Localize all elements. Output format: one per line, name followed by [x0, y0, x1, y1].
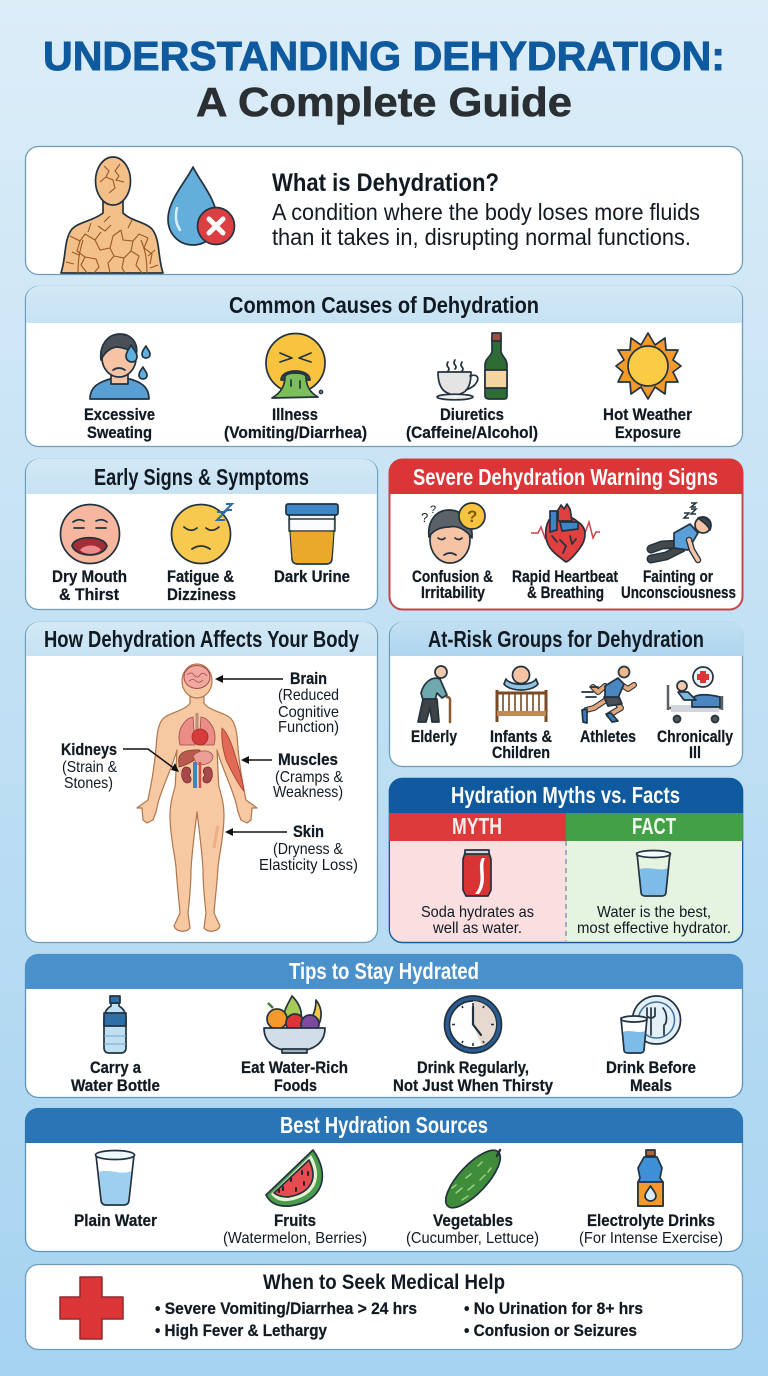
- label: muscles: (Cramps &: [275, 769, 343, 786]
- list: warning criteria: • Confusion or Seizures: [464, 1321, 637, 1340]
- label: muscles: Muscles: [278, 750, 338, 769]
- item: confusion: ?: [421, 510, 428, 525]
- item: electrolyte drinks: Electrolyte Drinks: [587, 1211, 715, 1230]
- heading: When to Seek Medical Help: [263, 1271, 505, 1294]
- label: brain: Cognitive: [278, 704, 339, 721]
- item: clock: Drink Regularly,: [417, 1058, 529, 1077]
- title: UNDERSTANDING DEHYDRATION:: [43, 33, 725, 79]
- icon: cracked dry body: [61, 157, 163, 273]
- panel: common causes: [26, 286, 742, 446]
- item: vegetables: (Cucumber, Lettuce): [406, 1230, 539, 1247]
- item: water bottle: Water Bottle: [71, 1076, 160, 1095]
- item: diuretics: [406, 333, 538, 442]
- text: definition: A condition where the body loses more fluids: [272, 199, 700, 225]
- label: skin: Skin: [293, 822, 324, 841]
- panel: myths vs facts: [389, 778, 743, 942]
- arrow: kidneys: [123, 749, 179, 772]
- item: clock: Not Just When Thirsty: [393, 1076, 553, 1095]
- panel: what is dehydration: [26, 146, 742, 274]
- item: fatigue: Dizziness: [167, 585, 236, 604]
- column: fact: [566, 813, 743, 942]
- item: fatigue: [167, 504, 236, 604]
- item: plain water: [74, 1150, 157, 1230]
- item: athletes: Athletes: [580, 727, 636, 746]
- text: definition: What is Dehydration?: [272, 169, 499, 197]
- column: fact: most effective hydrator.: [577, 920, 731, 937]
- item: vegetables: [406, 1142, 539, 1247]
- item: elderly: Elderly: [411, 727, 457, 746]
- item: infants: [490, 666, 552, 762]
- item: dark urine: Dark Urine: [274, 567, 350, 586]
- item: water bottle: [71, 996, 160, 1095]
- column: fact: FACT: [632, 813, 676, 839]
- label: muscles: [273, 750, 343, 801]
- item: confusion: ?: [467, 507, 477, 526]
- title: A Complete Guide: [196, 79, 572, 125]
- label: skin: Elasticity Loss): [259, 857, 358, 874]
- item: athletes: [580, 666, 636, 746]
- item: dry mouth: [52, 504, 127, 604]
- item: chronically ill: Chronically: [657, 727, 733, 746]
- label: muscles: Weakness): [273, 784, 343, 801]
- column: myth: [389, 813, 566, 942]
- item: hot weather: Exposure: [615, 423, 681, 442]
- item: chronically ill: [657, 667, 733, 762]
- icon: soda can: [463, 850, 491, 896]
- item: confusion: ?: [430, 504, 436, 516]
- text: definition: [272, 169, 700, 250]
- item: fruits: Fruits: [274, 1211, 316, 1230]
- heading: How Dehydration Affects Your Body: [44, 626, 359, 652]
- item: water-rich foods: [241, 996, 348, 1095]
- item: clock: [393, 996, 553, 1095]
- panel: severe warning signs: [389, 459, 743, 610]
- item: drink before meals: [606, 996, 696, 1095]
- item: hot weather: [603, 333, 692, 442]
- item: fatigue: Fatigue &: [167, 567, 234, 586]
- item: dry mouth: & Thirst: [59, 585, 119, 604]
- label: brain: (Reduced: [278, 687, 339, 704]
- panel: at-risk groups: [390, 622, 743, 766]
- arrow: muscles: [241, 756, 272, 764]
- item: infants: Infants &: [490, 727, 552, 746]
- item: fainting: [621, 503, 736, 602]
- heading: At-Risk Groups for Dehydration: [428, 626, 704, 652]
- item: diuretics: Diuretics: [440, 405, 504, 424]
- column: myth: Soda hydrates as: [421, 904, 534, 921]
- item: water-rich foods: Foods: [274, 1076, 317, 1095]
- item: water-rich foods: Eat Water-Rich: [241, 1058, 348, 1077]
- item: electrolyte drinks: [579, 1150, 723, 1247]
- heading: Best Hydration Sources: [280, 1112, 488, 1138]
- icon: glass of water: [636, 850, 670, 896]
- list: warning criteria: • No Urination for 8+ hrs: [464, 1299, 643, 1318]
- item: illness: (Vomiting/Diarrhea): [224, 423, 367, 442]
- item: drink before meals: Drink Before: [606, 1058, 696, 1077]
- label: brain: Brain: [290, 669, 327, 688]
- item: hot weather: Hot Weather: [603, 405, 692, 424]
- item: chronically ill: Ill: [689, 743, 701, 762]
- panel: early signs: [26, 459, 378, 610]
- arrow: brain: [215, 675, 283, 683]
- list: warning criteria: [155, 1299, 643, 1340]
- item: plain water: Plain Water: [74, 1211, 157, 1230]
- item: fruits: (Watermelon, Berries): [223, 1230, 367, 1247]
- label: skin: (Dryness &: [273, 841, 343, 858]
- heading: Hydration Myths vs. Facts: [451, 782, 680, 808]
- item: excessive sweating: Sweating: [87, 423, 152, 442]
- icon: red cross: [60, 1277, 123, 1339]
- label: brain: Function): [278, 719, 339, 736]
- item: dry mouth: Dry Mouth: [52, 567, 127, 586]
- arrow: skin: [225, 828, 287, 836]
- panel: when to seek medical help: [26, 1264, 742, 1350]
- item: illness: [224, 334, 367, 442]
- column: fact: Water is the best,: [597, 904, 711, 921]
- label: kidneys: [61, 740, 117, 792]
- item: confusion: Confusion &: [412, 567, 493, 586]
- item: dark urine: [274, 504, 350, 586]
- label: kidneys: Kidneys: [61, 740, 117, 759]
- item: illness: Illness: [272, 405, 318, 424]
- column: myth: well as water.: [432, 920, 522, 937]
- heading: Tips to Stay Hydrated: [289, 958, 479, 984]
- item: confusion: Irritability: [421, 583, 485, 602]
- item: elderly: [411, 666, 457, 746]
- item: drink before meals: Meals: [630, 1076, 672, 1095]
- item: rapid heartbeat: Rapid Heartbeat: [512, 567, 618, 586]
- item: water bottle: Carry a: [90, 1058, 141, 1077]
- item: infants: Children: [492, 743, 550, 762]
- list: warning criteria: • High Fever & Lethargy: [155, 1321, 327, 1340]
- item: electrolyte drinks: (For Intense Exercise): [579, 1230, 723, 1247]
- column: myth: MYTH: [452, 813, 502, 839]
- panel: how dehydration affects body: [26, 622, 378, 942]
- label: kidneys: Stones): [64, 775, 113, 792]
- item: rapid heartbeat: [512, 504, 618, 602]
- item: excessive sweating: Excessive: [84, 405, 155, 424]
- item: rapid heartbeat: & Breathing: [527, 583, 604, 602]
- item: fainting: Fainting or: [643, 567, 713, 586]
- list: warning criteria: • Severe Vomiting/Diarrhea > 24 hrs: [155, 1299, 417, 1318]
- icon: water drop with x: [168, 167, 234, 245]
- item: diuretics: (Caffeine/Alcohol): [406, 423, 538, 442]
- item: vegetables: Vegetables: [433, 1211, 513, 1230]
- item: confusion: [412, 503, 493, 602]
- heading: Early Signs & Symptoms: [94, 464, 309, 490]
- item: fruits: [223, 1150, 367, 1247]
- label: skin: [259, 822, 358, 874]
- item: excessive sweating: [84, 334, 155, 442]
- label: brain: [278, 669, 339, 736]
- item: fainting: Unconsciousness: [621, 583, 736, 602]
- panel: tips to stay hydrated: [25, 954, 743, 1098]
- text: definition: than it takes in, disrupting normal functions.: [272, 224, 691, 250]
- body diagram: [137, 664, 257, 931]
- title: [43, 33, 725, 125]
- label: kidneys: (Strain &: [62, 759, 117, 776]
- panel: best hydration sources: [25, 1108, 743, 1252]
- heading: Common Causes of Dehydration: [229, 292, 539, 318]
